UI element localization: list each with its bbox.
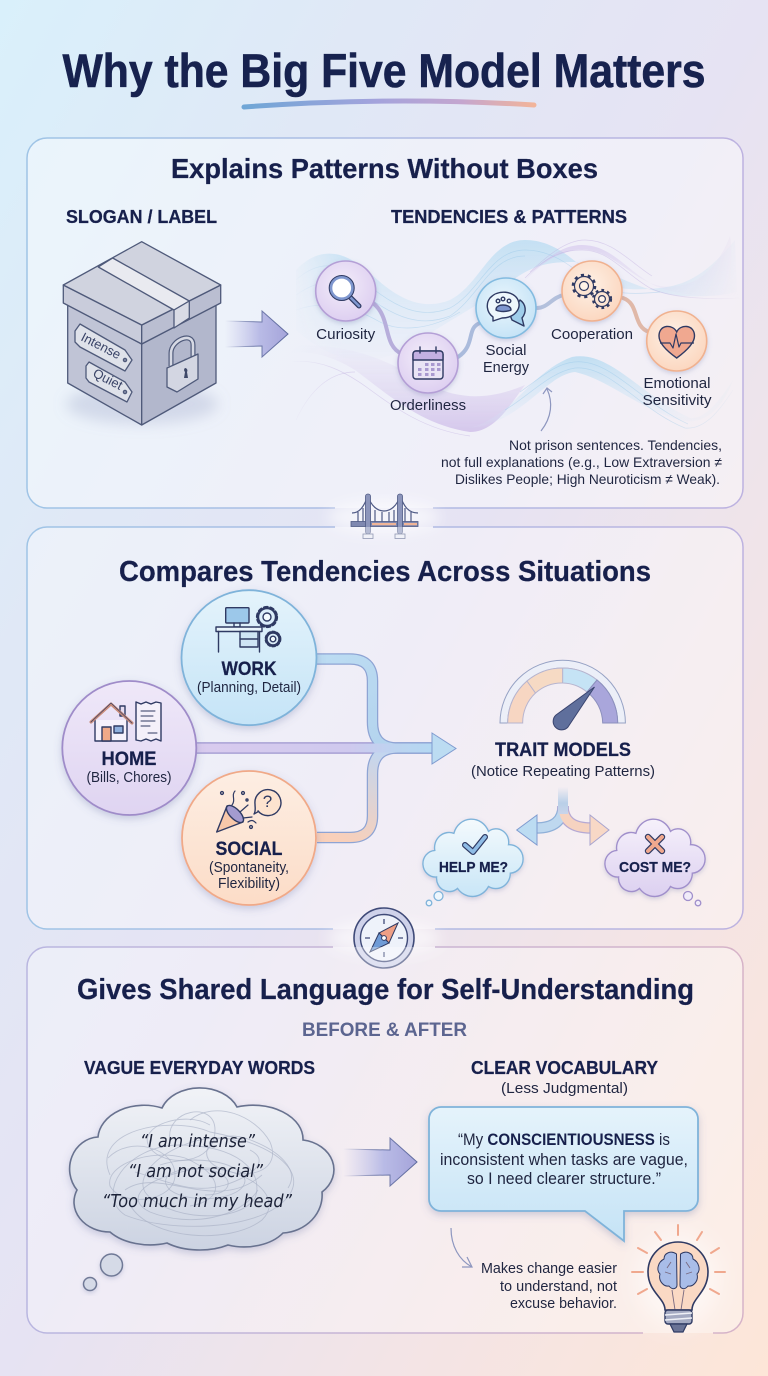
label: clear vocabulary: (Less Judgmental) [501,1081,628,1097]
arrows: help or cost fork [517,787,609,845]
label: WORK [222,658,276,680]
node: curiosity [316,261,376,343]
label: clear vocabulary [471,1058,658,1097]
quote text: “My CONSCIENTIOUSNESS is [458,1131,670,1149]
arrow: box to tendencies [225,311,288,357]
heading: explains patterns: Explains Patterns Without Boxes [171,153,598,184]
subheading: before and after: BEFORE & AFTER [302,1020,467,1041]
label: trait models: (Notice Repeating Patterns) [471,764,655,780]
node: work: (Planning, Detail) [197,680,301,696]
label: Curiosity [316,327,376,343]
thought cloud: vague words [70,1088,334,1290]
speech bubble: clear vocabulary: so I need clearer structure.” [467,1170,661,1188]
callout: not prison sentences [441,437,722,487]
node: social: (Spontaneity, [209,860,289,876]
node: emotional sensitivity [642,311,712,409]
callout: not prison sentences: Dislikes People; High Neuroticism ≠ Weak). [455,471,720,487]
icon: locked box with labels [63,242,221,425]
label: HELP ME? [439,859,508,876]
quote lines: “I am not social” [128,1161,264,1182]
label: Orderliness [390,398,466,414]
node: cooperation [551,261,633,343]
tag: quiet [86,362,132,402]
panel: compares tendencies [27,527,743,929]
icon: light bulb with brain [632,1225,725,1332]
chart: flowing wave ribbons [290,236,740,436]
title underline [244,101,534,107]
note: makes change easier [481,1261,617,1312]
icon: house and receipt [91,702,161,741]
icon: compass connector [328,908,440,968]
icon: desk and gears [216,608,280,652]
arrows: three situations merging [196,659,456,838]
label: Emotional [644,376,710,392]
arrow: note pointer [451,1228,472,1267]
node: home [62,681,196,815]
node: social energy: Energy [483,360,530,376]
label: HOME [102,748,156,770]
node: social [182,771,316,905]
label: Cooperation [551,327,633,343]
icon: cross mark [648,837,662,851]
node: home: (Bills, Chores) [86,770,172,786]
callout: not prison sentences: not full explanations (e.g., Low Extraversion ≠ [441,454,722,470]
label: Social [486,343,526,359]
node: social: Flexibility) [218,876,280,892]
tag: intense [75,324,132,371]
tag: intense: Intense [79,329,123,362]
icon: gears [574,276,610,308]
icon: padlock [167,338,198,392]
label: vague everyday words: VAGUE EVERYDAY WORDS [84,1058,315,1078]
icon: bridge connector [328,494,440,538]
heading: compares tendencies: Compares Tendencies Across Situations [119,556,651,588]
callout: not prison sentences: Not prison sentences. Tendencies, [509,437,722,453]
tag: quiet: Quiet [91,365,125,393]
label: trait models: TRAIT MODELS [495,739,631,761]
needle [553,687,594,730]
label: trait models [471,739,655,780]
icon: heart with pulse [659,326,694,358]
thought cloud: cost me [605,819,705,906]
node: orderliness [390,333,466,414]
quote lines [102,1131,293,1212]
label: slogan: SLOGAN / LABEL [66,206,217,227]
quote lines: “I am intense” [140,1131,256,1152]
title: Why the Big Five Model Matters [62,44,706,97]
arrow: vague to clear [343,1138,417,1186]
note: makes change easier: to understand, not [500,1279,617,1295]
speech bubble: clear vocabulary [429,1107,698,1241]
thought cloud: help me [423,819,523,906]
label: SOCIAL [216,838,283,860]
label: tendencies: TENDENCIES & PATTERNS [391,206,627,227]
panel: shared language [27,947,743,1333]
heading: shared language: Gives Shared Language for Self-Understanding [77,974,694,1006]
glyph: question mark: ? [263,792,272,811]
speech bubble: clear vocabulary: inconsistent when tasks are vague, [440,1151,688,1169]
node: emotional sensitivity: Sensitivity [642,393,712,409]
note: makes change easier: excuse behavior. [510,1296,617,1312]
icon: check mark [465,837,485,852]
panel: explains patterns without boxes [27,138,743,508]
quote lines: “Too much in my head” [102,1191,293,1212]
label: COST ME? [619,859,691,876]
arrow: note pointing to waves [541,388,552,431]
connectors between trait nodes [373,295,649,357]
node: social energy [476,278,536,376]
icon: calendar [413,347,443,379]
icon: party popper and question bubble [217,790,281,832]
scribble [107,1111,294,1236]
note: makes change easier: Makes change easier [481,1261,617,1277]
chart: trait gauge [500,660,625,730]
icon: chat bubbles [487,292,525,326]
icon: magnifier [329,276,359,306]
node: work [182,590,316,725]
label: clear vocabulary: CLEAR VOCABULARY [471,1058,658,1078]
